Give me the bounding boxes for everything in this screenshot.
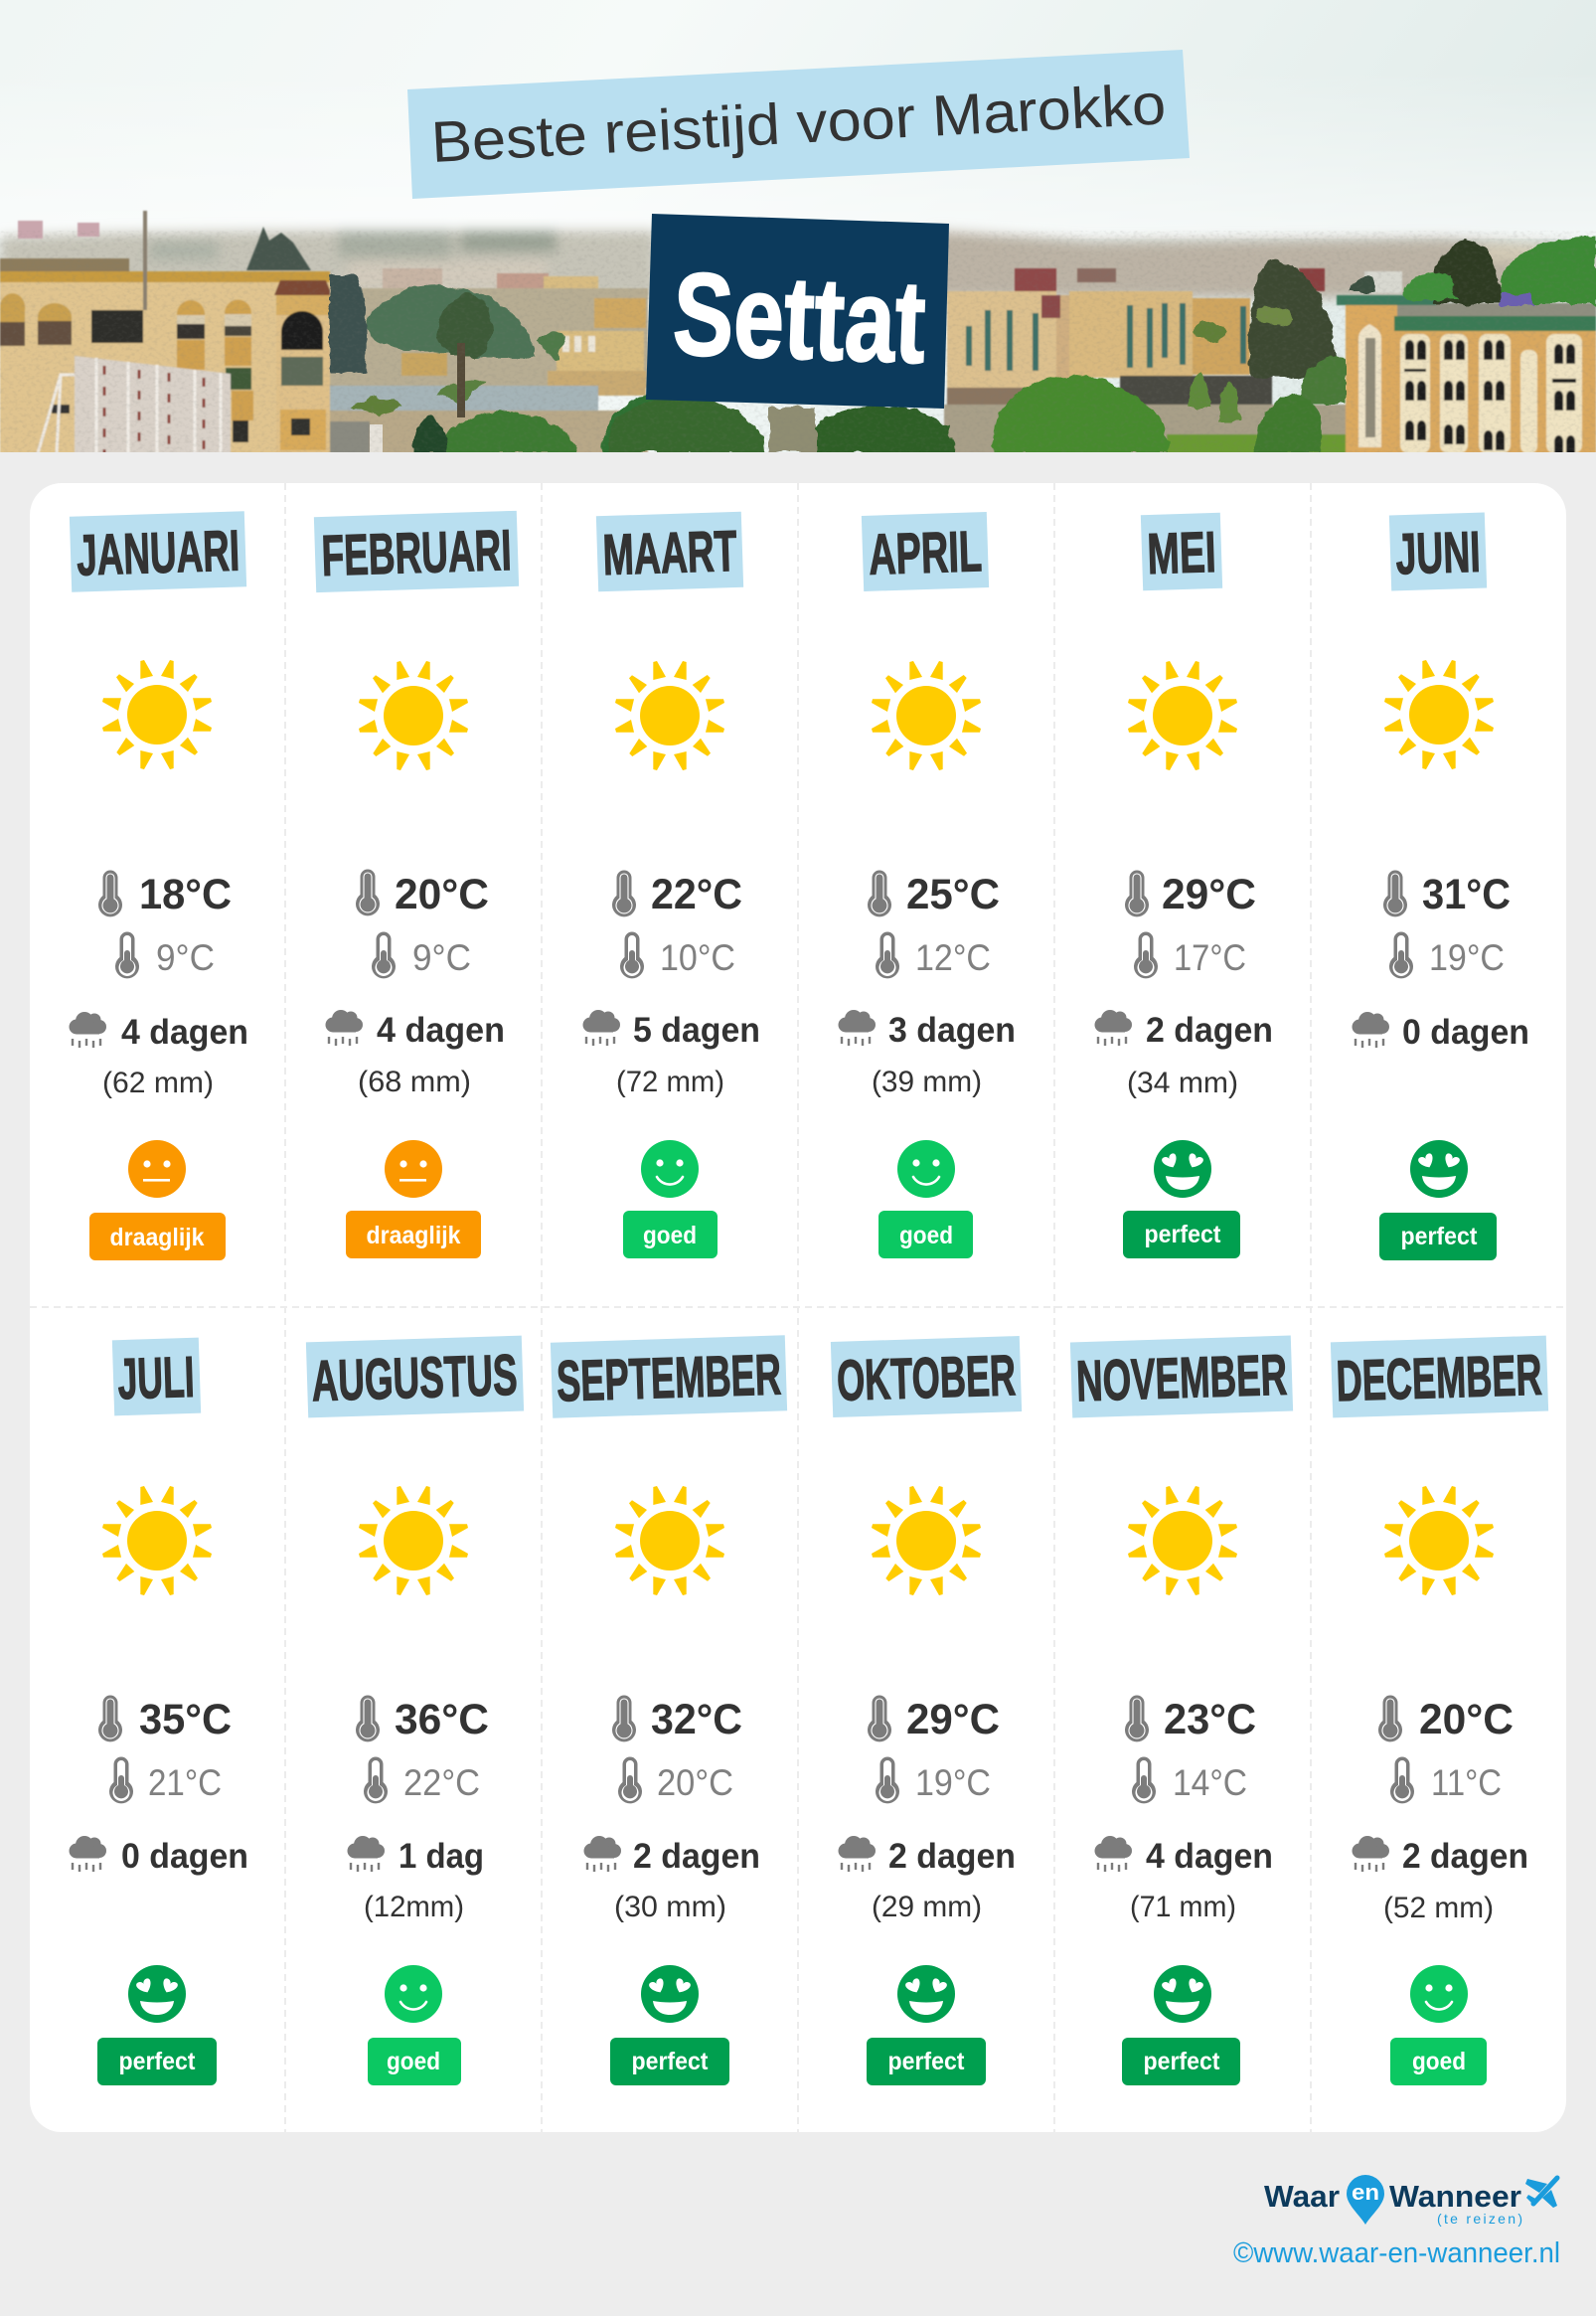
rain days — [326, 1010, 505, 1050]
icon: map pin: en — [1352, 2180, 1379, 2205]
rating badge — [97, 2038, 217, 2085]
hazy distant city — [0, 231, 1596, 298]
low temperature: 17°C — [1174, 937, 1246, 978]
low temperature: 20°C — [657, 1762, 733, 1803]
column: mei — [1095, 513, 1273, 1258]
high temperature: 29°C — [1162, 871, 1256, 918]
high temperature: 18°C — [139, 871, 232, 918]
low temperature — [618, 1757, 733, 1803]
icon: happy face — [1410, 1965, 1468, 2023]
column: juni — [1352, 513, 1529, 1260]
rainfall: (12mm) — [364, 1891, 464, 1923]
rain days: 2 dagen — [1402, 1837, 1528, 1876]
title ribbon: Beste reistijd voor Marokko — [429, 72, 1168, 175]
icon: heart-eyes face — [897, 1965, 955, 2023]
high temperature: 32°C — [651, 1696, 742, 1743]
icon: sun — [1128, 1486, 1237, 1595]
high temperature: 20°C — [1419, 1696, 1514, 1743]
rating badge — [1390, 2038, 1487, 2085]
rain days — [582, 1010, 760, 1050]
low temperature: 19°C — [1429, 937, 1505, 978]
icon: sun — [615, 661, 724, 770]
icon: sun — [1128, 661, 1237, 770]
month label: JUNI — [1395, 520, 1482, 586]
low temperature — [115, 932, 215, 978]
rain days — [348, 1836, 484, 1876]
month label — [306, 1336, 524, 1417]
icon: heart-eyes face — [641, 1965, 699, 2023]
month label: MAART — [602, 519, 738, 587]
icon: sun — [872, 661, 981, 770]
rating badge: goed — [899, 1222, 953, 1249]
rating badge: perfect — [632, 2048, 709, 2075]
low temperature — [1390, 1757, 1502, 1803]
high temperature: 25°C — [906, 871, 1000, 918]
rating badge — [346, 1211, 481, 1258]
column: januari — [70, 511, 248, 1260]
rain days — [1352, 1012, 1529, 1052]
month label: SEPTEMBER — [556, 1342, 782, 1414]
column: juli — [70, 1338, 248, 2085]
icon: sun — [102, 1486, 212, 1595]
month label — [831, 1336, 1022, 1417]
rain days: 0 dagen — [1402, 1013, 1529, 1052]
rainfall: (62 mm) — [102, 1067, 214, 1099]
rain days: 3 dagen — [888, 1011, 1016, 1050]
high temperature — [612, 1696, 742, 1743]
icon: happy face — [897, 1140, 955, 1198]
white card panel — [30, 483, 1566, 2132]
header photo: city skyline of Settat — [0, 0, 1596, 464]
low temperature: 22°C — [403, 1762, 480, 1803]
rating badge: perfect — [1145, 1221, 1221, 1248]
low temperature — [1389, 932, 1505, 978]
month label: JULI — [117, 1345, 196, 1411]
high temperature — [1383, 871, 1511, 918]
icon: neutral face — [128, 1140, 186, 1198]
low temperature: 12°C — [915, 937, 991, 978]
rain days — [70, 1012, 248, 1052]
low temperature: 19°C — [915, 1762, 991, 1803]
low temperature — [109, 1757, 222, 1803]
low temperature: 9°C — [156, 937, 215, 978]
right side buildings — [944, 268, 1596, 455]
title ribbon — [407, 50, 1190, 199]
column: november — [1070, 1336, 1293, 2085]
far right building — [1396, 303, 1596, 317]
column: april — [839, 512, 1016, 1258]
rating badge: draaglijk — [109, 1224, 205, 1251]
rain days — [839, 1836, 1016, 1876]
rain days: 2 dagen — [888, 1837, 1016, 1876]
logo: Waar en Wanneer — [1264, 2175, 1557, 2227]
low temperature — [1132, 1757, 1247, 1803]
high temperature: 29°C — [906, 1696, 1000, 1743]
high temperature: 23°C — [1164, 1696, 1256, 1743]
icon: heart-eyes face — [1154, 1140, 1211, 1198]
rating badge — [1123, 1211, 1240, 1258]
logo: Waar en Wanneer: (te reizen) — [1437, 2211, 1522, 2227]
month label — [596, 512, 743, 591]
icon: sun — [102, 660, 212, 769]
rainfall: (30 mm) — [614, 1891, 726, 1923]
column: maart — [582, 512, 760, 1258]
low temperature: 9°C — [412, 937, 471, 978]
rain days — [839, 1010, 1016, 1050]
rain days: 5 dagen — [633, 1011, 760, 1050]
logo: Waar en Wanneer: Waar — [1264, 2179, 1340, 2214]
distant trees — [246, 227, 311, 270]
rain days: 4 dagen — [377, 1011, 505, 1050]
column: augustus — [306, 1336, 524, 2085]
high temperature — [868, 1696, 1000, 1743]
month label — [314, 511, 519, 592]
month label: NOVEMBER — [1075, 1343, 1288, 1413]
high temperature — [98, 1696, 232, 1743]
rainfall: (39 mm) — [872, 1066, 982, 1098]
icon: heart-eyes face — [1154, 1965, 1211, 2023]
rain days — [1352, 1836, 1528, 1876]
rating badge: goed — [1412, 2048, 1466, 2075]
rain days — [70, 1836, 248, 1876]
photo texture overlay — [0, 231, 1596, 452]
month label: FEBRUARI — [321, 518, 513, 588]
rainfall: (29 mm) — [872, 1891, 982, 1923]
column: september — [551, 1335, 787, 2085]
rainfall: (71 mm) — [1130, 1891, 1236, 1923]
high temperature: 31°C — [1422, 871, 1511, 918]
high temperature — [1125, 1696, 1256, 1743]
rain days: 4 dagen — [1146, 1837, 1273, 1876]
month label — [862, 512, 989, 591]
month label — [1389, 513, 1487, 590]
high temperature: 35°C — [139, 1696, 232, 1743]
low temperature — [876, 932, 991, 978]
rain days: 1 dag — [399, 1837, 484, 1876]
high temperature — [868, 871, 1000, 918]
rating badge: perfect — [1143, 2048, 1220, 2075]
low temperature — [876, 1757, 991, 1803]
month label — [1141, 513, 1222, 590]
low temperature — [1134, 932, 1246, 978]
rainfall: (52 mm) — [1383, 1892, 1494, 1924]
month label: APRIL — [868, 519, 983, 587]
high temperature — [356, 869, 489, 918]
high temperature — [1378, 1696, 1514, 1743]
icon: neutral face — [385, 1140, 442, 1198]
low temperature: 11°C — [1431, 1762, 1502, 1803]
rating badge — [368, 2038, 461, 2085]
rating badge: draaglijk — [366, 1222, 461, 1249]
month label — [112, 1338, 201, 1415]
low temperature: 21°C — [148, 1762, 222, 1803]
month label: MEI — [1147, 520, 1217, 586]
rating badge: goed — [643, 1222, 697, 1249]
page colour below the photo — [0, 452, 1596, 464]
icon: heart-eyes face — [1410, 1140, 1468, 1198]
month label — [551, 1335, 787, 1418]
icon: sun — [359, 661, 468, 770]
rating badge — [89, 1213, 226, 1260]
rain days: 0 dagen — [121, 1837, 248, 1876]
logo: Waar en Wanneer: Wanneer — [1389, 2179, 1521, 2214]
website credit: ©www.waar-en-wanneer.nl — [1233, 2237, 1560, 2269]
rain days — [584, 1836, 760, 1876]
icon: heart-eyes face — [128, 1965, 186, 2023]
rating badge — [878, 1211, 973, 1258]
rating badge — [1122, 2038, 1240, 2085]
month label — [70, 511, 246, 592]
low temperature — [364, 1757, 480, 1803]
rating badge — [623, 1211, 718, 1258]
rating badge — [610, 2038, 729, 2085]
column: oktober — [831, 1336, 1022, 2085]
month label: AUGUSTUS — [311, 1343, 519, 1413]
low temperature — [620, 932, 735, 978]
icon: sun — [359, 1486, 468, 1595]
rain days — [1095, 1836, 1273, 1876]
rating badge — [1379, 1213, 1497, 1260]
icon: airplane — [1525, 2178, 1557, 2208]
white ladder and hoarding — [38, 375, 75, 453]
centre: dark tree, gardens, buildings — [497, 273, 549, 318]
high temperature: 36°C — [395, 1696, 489, 1743]
icon: sun — [872, 1486, 981, 1595]
city name plate — [646, 214, 949, 409]
column: december — [1331, 1336, 1548, 2085]
rainfall: (72 mm) — [616, 1066, 724, 1098]
high temperature: 20°C — [395, 871, 489, 918]
rating badge: perfect — [888, 2048, 965, 2075]
high temperature — [612, 871, 742, 918]
left building — [0, 281, 333, 453]
rainfall: (68 mm) — [358, 1066, 471, 1098]
month label: OKTOBER — [836, 1343, 1017, 1413]
icon: happy face — [385, 1965, 442, 2023]
icon: sun — [1384, 660, 1494, 769]
high temperature — [356, 1696, 489, 1743]
rating badge: perfect — [119, 2048, 196, 2075]
icon: sun — [1384, 1486, 1494, 1595]
rating badge: perfect — [1401, 1223, 1478, 1250]
rating badge: goed — [387, 2048, 440, 2075]
low temperature: 10°C — [660, 937, 735, 978]
low temperature: 14°C — [1173, 1762, 1247, 1803]
rain days: 2 dagen — [633, 1837, 760, 1876]
icon: map pin — [1347, 2175, 1384, 2225]
city name plate: Settat — [671, 248, 928, 389]
high temperature: 22°C — [651, 871, 742, 918]
rainfall: (34 mm) — [1127, 1067, 1238, 1099]
column: februari — [314, 511, 519, 1258]
rating badge — [867, 2038, 986, 2085]
icon: sun — [615, 1486, 724, 1595]
month label: JANUARI — [76, 518, 240, 588]
icon: happy face — [641, 1140, 699, 1198]
high temperature — [98, 871, 232, 918]
rain days — [1095, 1010, 1273, 1050]
low temperature — [372, 932, 471, 978]
month label — [1070, 1336, 1293, 1417]
rain days: 2 dagen — [1146, 1011, 1273, 1050]
rain days: 4 dagen — [121, 1013, 248, 1052]
